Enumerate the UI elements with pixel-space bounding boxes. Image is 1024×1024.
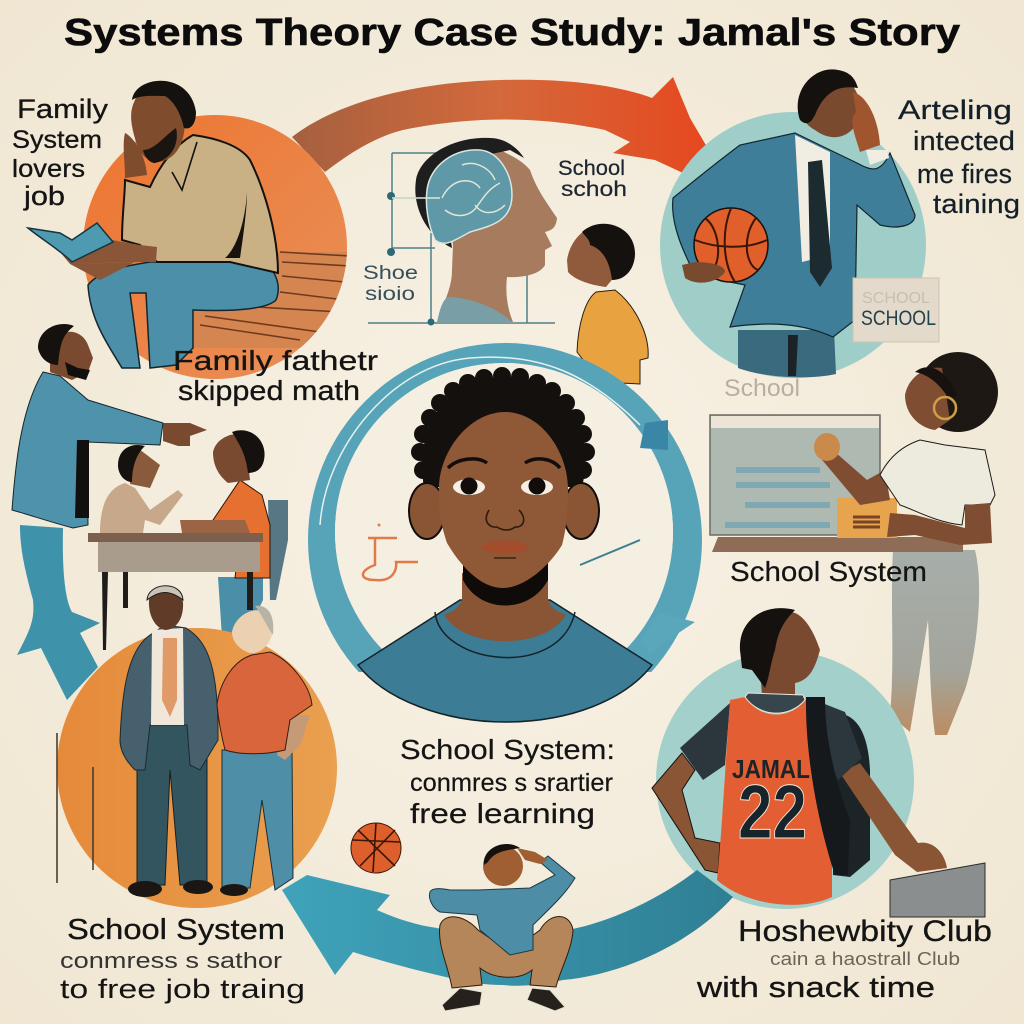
- text: club label: cain a haostrall Club: [770, 949, 960, 969]
- shirt: [880, 440, 995, 525]
- orange circle: [83, 115, 347, 379]
- hand: [517, 848, 548, 864]
- inner disc: [335, 363, 673, 701]
- panel: family system father: [28, 81, 353, 379]
- tie: [75, 440, 89, 518]
- hand: [163, 423, 207, 446]
- text: school label: [558, 157, 627, 201]
- hair: [798, 69, 858, 123]
- text: article label: me fires: [917, 159, 1012, 189]
- jersey number: 22: [738, 770, 807, 855]
- father beard: [143, 128, 177, 163]
- two children: [100, 430, 288, 637]
- text: school system right: School System: [730, 556, 927, 587]
- text: family system loses job: System: [12, 126, 102, 154]
- card: [837, 498, 897, 538]
- text: school label: schoh: [561, 178, 627, 201]
- left arm: [652, 753, 720, 873]
- briefcase: [890, 863, 985, 917]
- panel: woman at whiteboard: [710, 352, 998, 735]
- text: school system bottom left: School System: [67, 914, 285, 946]
- text: family system loses job: [12, 94, 109, 211]
- hair back: [415, 138, 524, 248]
- book: [28, 223, 113, 262]
- tie: [808, 160, 832, 287]
- shoes: [442, 988, 482, 1011]
- text: school system bottom left: conmress s sathor: [60, 948, 282, 973]
- text: club label: with snack time: [696, 972, 935, 1004]
- shirt: [217, 652, 312, 754]
- hair: [918, 352, 998, 432]
- text: school system bottom left: to free job traing: [60, 974, 305, 1004]
- text: shape label: sioio: [365, 284, 415, 305]
- nose and mouth: [486, 510, 524, 530]
- text: school system bottom left: [60, 914, 305, 1004]
- panel: central lower text: free learning: [410, 798, 595, 829]
- text: family system loses job: lovers: [12, 155, 85, 183]
- trousers: [738, 330, 836, 377]
- ears: [409, 483, 445, 539]
- small boy: [567, 224, 648, 384]
- whiteboard: [710, 415, 880, 535]
- sign: school: SCHOOL: [861, 307, 936, 330]
- text: article label: intected: [913, 126, 1015, 156]
- text: article label: taining: [933, 189, 1020, 219]
- hand on face: [852, 92, 880, 152]
- right child arm: [180, 520, 250, 533]
- face: [439, 412, 568, 588]
- beard: [65, 362, 90, 380]
- jersey name: JAMAL: [732, 754, 810, 784]
- jeans: [890, 550, 979, 735]
- man pointing: [12, 324, 207, 528]
- icon: small basketball: [351, 823, 401, 873]
- head: [760, 612, 820, 695]
- neck shirt: [437, 297, 513, 323]
- panel: central lower text: [400, 734, 615, 829]
- man in orange shirt: [217, 606, 312, 896]
- father hair: [132, 81, 196, 128]
- eyes: [453, 479, 485, 495]
- chair: [268, 500, 288, 600]
- panel: teal circle suit man: [660, 69, 926, 378]
- text: shape label: [363, 263, 418, 305]
- text: family father skipped math: skipped math: [178, 375, 360, 406]
- shirt: [151, 628, 184, 725]
- jeans: [222, 750, 293, 890]
- raised arm and fist: [818, 452, 890, 505]
- jacket: [120, 625, 218, 770]
- shirt: [795, 135, 830, 262]
- head profile: [437, 148, 557, 322]
- father hand: [60, 240, 157, 280]
- ring: central teal ring: [308, 343, 702, 672]
- arrow: red top arrow: [292, 77, 707, 173]
- text: family father skipped math: Family fathetr: [173, 345, 378, 376]
- sweater: [429, 856, 575, 955]
- title: Systems Theory Case Study: Jamal's Story: [64, 12, 960, 54]
- sign: school: SCHOOL: [862, 290, 930, 307]
- arrow: teal bottom arrow: [282, 870, 733, 986]
- text: article label: [898, 95, 1020, 219]
- icon: small arrow line: [580, 540, 640, 565]
- brain: [392, 150, 512, 243]
- table: [712, 537, 963, 552]
- panel: central lower text: conmres s srartier: [410, 769, 613, 797]
- figure: sitting boy: [429, 844, 575, 1011]
- panel: two men in orange circle: [57, 586, 337, 908]
- panel: father and children at desk: [12, 324, 288, 700]
- teal circle: [656, 651, 914, 909]
- head: [483, 846, 523, 886]
- arm: [277, 715, 310, 760]
- panel: central boy portrait: [358, 367, 652, 722]
- other arm: [887, 503, 992, 545]
- right child shirt: [213, 480, 270, 578]
- text: club label: [696, 915, 992, 1004]
- face: [905, 368, 950, 430]
- legs: [439, 916, 573, 988]
- suit jacket: [673, 133, 915, 337]
- hair: [38, 324, 74, 365]
- collar line: [435, 612, 575, 658]
- head: [149, 592, 183, 630]
- panel: brain and boy: [368, 138, 648, 384]
- backpack: [833, 713, 870, 877]
- bench: [193, 252, 353, 348]
- orange circle: [57, 628, 337, 908]
- text: family father skipped math: [173, 345, 378, 406]
- chin shadow: [463, 555, 548, 606]
- text: family system loses job: Family: [17, 94, 109, 124]
- hair: [411, 367, 595, 487]
- hair: [484, 844, 520, 865]
- right child head: [213, 434, 250, 483]
- right child jeans: [218, 577, 263, 637]
- text: school label: School: [558, 157, 625, 180]
- text: article label: Arteling: [898, 95, 1012, 125]
- neck: [444, 573, 566, 641]
- icon: small orange symbol: [363, 524, 418, 580]
- text: club label: Hoshewbity Club: [738, 915, 992, 948]
- man in suit: [120, 586, 218, 897]
- jersey: [717, 697, 832, 905]
- head: [232, 610, 273, 653]
- hand under ball: [682, 262, 725, 283]
- shoes: [128, 881, 162, 897]
- brows: [448, 459, 560, 468]
- father shirt: [122, 135, 278, 273]
- teal curve arrow: [17, 525, 100, 700]
- head: [800, 75, 860, 137]
- panel: central lower text: School System:: [400, 734, 615, 765]
- text: school faded: School: [724, 375, 800, 402]
- head: [50, 332, 93, 380]
- text: shape label: Shoe: [363, 263, 418, 284]
- left child: [100, 483, 183, 533]
- desk: [88, 533, 263, 650]
- right arm: [840, 763, 947, 872]
- father legs: [88, 262, 278, 368]
- sleeves: [680, 703, 730, 780]
- sign: school: [853, 278, 939, 342]
- strap: [806, 697, 850, 875]
- jacket: [12, 372, 163, 528]
- sweater: [358, 600, 652, 722]
- grid lines: [368, 153, 555, 323]
- text: family system loses job: job: [23, 181, 65, 211]
- teal circle: [660, 112, 926, 378]
- basketball: [694, 208, 768, 282]
- tie: [162, 638, 177, 717]
- panel: jersey teen in teal circle: [652, 608, 985, 917]
- father head: [131, 90, 185, 162]
- hair: [740, 608, 795, 688]
- trousers: [137, 725, 207, 885]
